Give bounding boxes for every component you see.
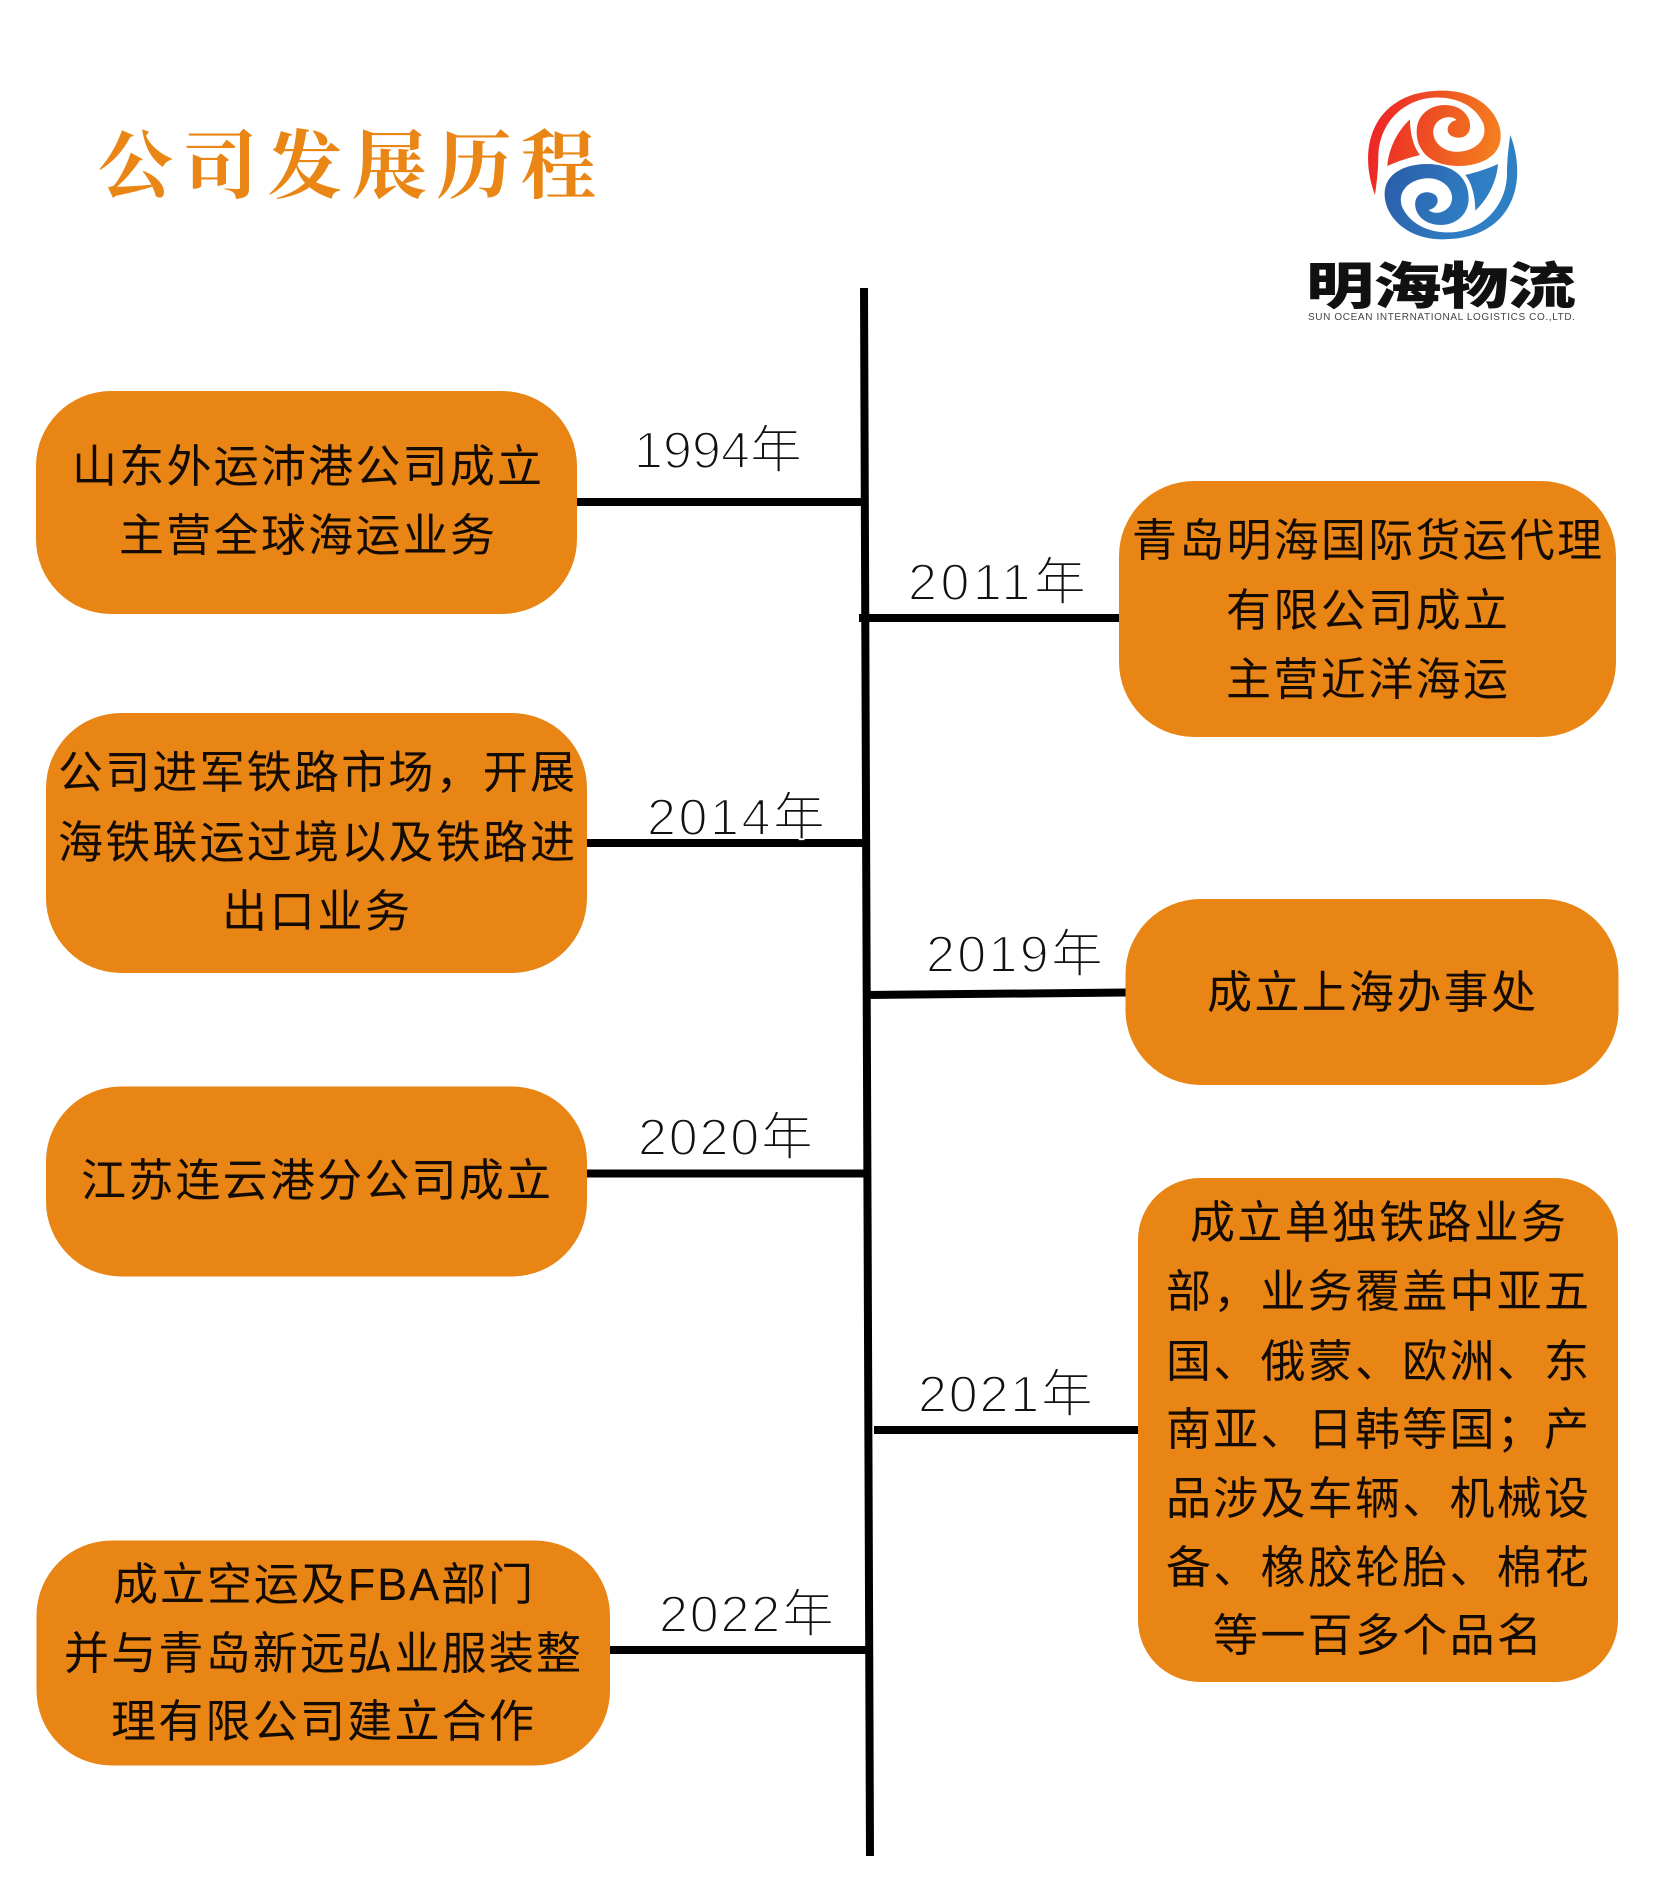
panel: 2022: 成立空运及FBA部门 — [113, 1559, 533, 1610]
connector: 2011 — [859, 614, 1120, 622]
logo wordmark: 明海物流 — [1306, 259, 1576, 315]
panel: 2021: 国、俄蒙、欧洲、东 — [1166, 1336, 1589, 1387]
year label: 1994: 1994年 — [634, 422, 802, 480]
panel: 2021: 品涉及车辆、机械设 — [1166, 1473, 1589, 1524]
panel: 2021: 南亚、日韩等国；产 — [1166, 1404, 1589, 1455]
connector: 2020 — [587, 1170, 868, 1178]
logo — [1306, 91, 1576, 323]
title: 公司发展历程 — [98, 126, 596, 209]
panel: 2014: 出口业务 — [222, 886, 410, 937]
panel: 2011: 主营近洋海运 — [1226, 654, 1508, 705]
panel: 2019 — [1126, 899, 1618, 1085]
connector: 2019 — [868, 992, 1126, 995]
icon: logo emblem — [1368, 91, 1517, 239]
panel: 2020: 江苏连云港分公司成立 — [81, 1155, 551, 1206]
panel: 2019: 成立上海办事处 — [1207, 967, 1536, 1018]
connector: 2014 — [587, 839, 866, 847]
panel: 2011 — [1119, 481, 1616, 737]
year label: 2021: 2021年 — [918, 1366, 1093, 1424]
year label: 2014: 2014年 — [647, 789, 825, 847]
year label: 2011: 2011年 — [908, 554, 1086, 612]
timeline axis — [864, 288, 870, 1856]
panel: 2021: 成立单独铁路业务 — [1190, 1197, 1566, 1248]
panel: 1994 — [36, 391, 577, 614]
panel: 2021: 等一百多个品名 — [1213, 1610, 1542, 1661]
panel: 2021: 备、橡胶轮胎、棉花 — [1166, 1542, 1589, 1593]
year label: 2020: 2020年 — [638, 1109, 813, 1167]
panel: 2021 — [1138, 1178, 1618, 1682]
year label: 2019: 2019年 — [926, 926, 1103, 984]
panel: 2020 — [46, 1086, 587, 1276]
logo English name: SUN OCEAN INTERNATIONAL LOGISTICS CO.,LTD. — [1308, 312, 1575, 323]
panel: 2022: 理有限公司建立合作 — [111, 1696, 534, 1747]
panel: 2011: 有限公司成立 — [1226, 585, 1508, 636]
panel: 1994: 主营全球海运业务 — [119, 510, 495, 561]
panel: 2022: 并与青岛新远弘业服装整 — [64, 1628, 581, 1679]
connector: 1994 — [577, 498, 866, 506]
connector: 2021 — [874, 1426, 1138, 1434]
panel: 2011: 青岛明海国际货运代理 — [1132, 515, 1602, 566]
panel: 2014: 海铁联运过境以及铁路进 — [58, 817, 575, 868]
connector: 2022 — [610, 1646, 869, 1654]
panel: 2022 — [36, 1540, 610, 1766]
year label: 2022: 2022年 — [659, 1586, 834, 1644]
panel: 2014 — [46, 713, 587, 973]
panel: 2014: 公司进军铁路市场，开展 — [58, 747, 575, 798]
panel: 1994: 山东外运沛港公司成立 — [72, 441, 542, 492]
panel: 2021: 部，业务覆盖中亚五 — [1166, 1266, 1589, 1317]
